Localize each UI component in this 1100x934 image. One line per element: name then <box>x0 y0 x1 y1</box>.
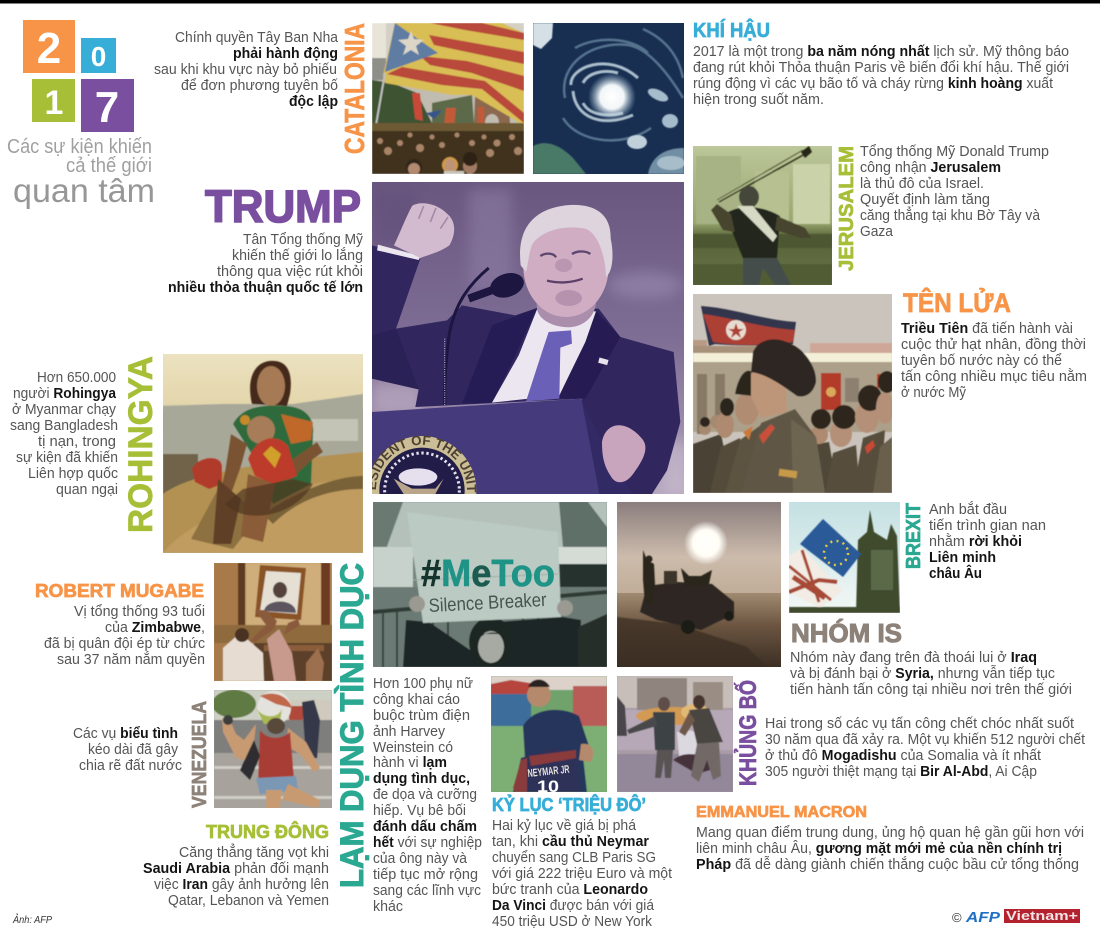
logo: AFP and Vietnam+: Vietnam+ <box>1006 908 1078 923</box>
text: Jerusalem: Tổng thống Mỹ Donald Trump <box>860 144 1049 160</box>
text: Brexit <box>929 501 1046 582</box>
text: Catalonia: để đơn phương tuyên bố <box>181 78 338 94</box>
panel: Emmanuel Macron <box>696 804 1084 873</box>
text: Rohingya: sang Bangladesh <box>10 418 118 434</box>
heading: Emmanuel Macron: EMMANUEL MACRON <box>696 804 867 821</box>
text: Robert Mugabe <box>44 604 205 668</box>
heading: Catalonia: CATALONIA <box>339 23 370 154</box>
text: Tên lửa: ở nước Mỹ <box>901 385 967 401</box>
heading: Nhóm IS: NHÓM IS <box>791 618 902 648</box>
text: Kỷ lục triệu đô: chuyển sang CLB Paris SG <box>492 850 656 866</box>
text: Lạm dụng tình dục: Hơn 100 phụ nữ <box>373 676 473 692</box>
soldier 3 <box>710 438 743 493</box>
heading: Khí hậu: KHÍ HẬU <box>693 18 770 42</box>
text: Lạm dụng tình dục <box>373 676 482 915</box>
square: digit 7 <box>81 79 134 132</box>
heading: Kỷ lục triệu đô: KỶ LỤC ‘TRIỆU ĐÔ’ <box>492 794 646 815</box>
photo: Mugabe portrait held up <box>214 563 332 681</box>
heading: Khủng bố: KHỦNG BỐ <box>733 680 762 786</box>
cuff <box>377 245 421 260</box>
text: Tên lửa <box>901 321 1087 401</box>
heading: Trump: TRUMP <box>205 181 361 232</box>
seal <box>368 436 476 545</box>
text: Kỷ lục triệu đô: Da Vinci được bán với giá <box>492 898 655 914</box>
subtitle <box>7 136 155 209</box>
text: Emmanuel Macron: Pháp đã dễ dàng giành chiến thắng cuộc bầu cử tổng thống <box>696 856 1079 873</box>
heading: Tên lửa: TÊN LỬA <box>903 286 1011 318</box>
panel: Venezuela <box>73 690 332 808</box>
shirt <box>492 309 596 403</box>
panel: Nhóm IS <box>617 502 1072 698</box>
text: Kỷ lục triệu đô: 450 triệu USD ở New York <box>492 914 653 930</box>
text: Trung Đông <box>143 843 329 909</box>
right group <box>811 442 838 493</box>
mic <box>445 268 489 405</box>
photo: #MeToo protest sign: Silence Breaker <box>428 590 548 617</box>
skirts <box>248 438 297 484</box>
text: Lạm dụng tình dục: của ông này và <box>373 851 468 867</box>
text: Khí hậu: đang rút khỏi Thỏa thuận Paris về biến đổi khí hậu. Thế giới <box>693 60 1069 76</box>
text: Tên lửa: tấn công nhiều mục tiêu nằm <box>901 368 1087 385</box>
text: Kỷ lục triệu đô: với giá 222 triệu Euro và một <box>492 866 672 882</box>
text: Rohingya: Liên hợp quốc <box>28 466 118 482</box>
text: Khủng bố: ở thủ đô Mogadishu của Somalia và ít nhất <box>765 748 1041 764</box>
text: Khí hậu: rúng động vì các vụ bão tố và cháy rừng kinh hoàng xuất <box>693 76 1053 92</box>
fist <box>394 203 454 258</box>
text: Nhóm IS: và bị đánh bại ở Syria, nhưng vẫn tiếp tục <box>790 665 1055 682</box>
main soldier <box>741 409 825 493</box>
text: Rohingya: ở Myanmar chạy <box>12 402 117 418</box>
text: Khủng bố <box>765 716 1085 780</box>
panel: Lạm dụng tình dục <box>334 502 607 915</box>
text: Nhóm IS <box>790 650 1072 698</box>
text: Kỷ lục triệu đô: tan, khi cầu thủ Neymar <box>492 834 649 850</box>
photo: #MeToo protest sign <box>373 502 607 667</box>
text: Lạm dụng tình dục: ảnh Harvey <box>373 724 446 740</box>
text: Lạm dụng tình dục: đe dọa và cưỡng <box>373 787 477 803</box>
legs <box>213 479 241 544</box>
text: Jerusalem: Quyết định làm tăng <box>860 192 990 208</box>
panel: Tên lửa <box>693 286 1087 493</box>
heading: Trung Đông: TRUNG ĐÔNG <box>206 821 329 842</box>
photo: aftermath of an attack <box>617 676 733 792</box>
text: Khí hậu: hiện trong suốt năm. <box>693 92 824 108</box>
text: Tên lửa: Triều Tiên đã tiến hành vài <box>901 321 1073 337</box>
pin <box>598 358 609 365</box>
tie <box>526 330 572 401</box>
text: Catalonia <box>154 30 339 110</box>
text: Jerusalem: công nhận Jerusalem <box>860 160 1001 176</box>
text: Robert Mugabe: Vị tổng thống 93 tuổi <box>74 604 205 620</box>
heading: Venezuela: VENEZUELA <box>189 701 211 808</box>
panel: Robert Mugabe <box>35 563 332 681</box>
neck and face <box>535 282 596 327</box>
text: Brexit: nhằm rời khỏi <box>929 533 1022 550</box>
heading: Jerusalem: JERUSALEM <box>836 146 858 271</box>
text: Rohingya: tị nạn, trong <box>38 434 116 450</box>
text: Lạm dụng tình dục: sang các lĩnh vực <box>373 883 481 899</box>
text: Jerusalem: Gaza <box>860 224 894 240</box>
square: digit 1 <box>32 79 75 122</box>
photo: Neymar with PSG shirt: 10 <box>537 777 559 796</box>
photo: stone slinger <box>693 146 832 285</box>
text: Trung Đông: Saudi Arabia phản đối mạnh <box>143 861 329 877</box>
text: Khí hậu <box>693 44 1069 108</box>
panel: Trump <box>168 181 684 494</box>
text: Lạm dụng tình dục: đánh dấu chấm <box>373 819 477 835</box>
text: Catalonia: sau khi khu vực này bỏ phiếu <box>154 62 337 78</box>
photo: Rohingya child <box>163 354 363 553</box>
photo: Neymar with PSG shirt <box>491 676 607 796</box>
text: Venezuela: Các vụ biểu tình <box>73 726 178 742</box>
text: Tên lửa: cuộc thử hạt nhân, đồng thời <box>901 337 1086 353</box>
text: Tên lửa: tuyên bố nước này có thể <box>901 353 1062 369</box>
text: Venezuela <box>73 726 182 774</box>
text: Trump <box>168 232 364 296</box>
photo: vehicle in desert at sunset <box>617 502 781 667</box>
text: Robert Mugabe: sau 37 năm nắm quyền <box>57 651 205 668</box>
photo: EU and UK flags at Westminster <box>789 502 900 613</box>
logo: AFP and Vietnam+: AFP <box>965 909 1001 926</box>
photo: hurricane from space <box>533 23 684 174</box>
photo: #MeToo protest sign: #MeToo <box>421 553 555 595</box>
text: Brexit: Liên minh <box>929 550 996 566</box>
photo: Trump at podium <box>372 182 684 494</box>
arms <box>221 434 247 494</box>
subtitle: quan tâm <box>13 172 155 209</box>
text: Emmanuel Macron: Mang quan điểm trung dung, ủng hộ quan hệ gần gũi hơn với <box>696 825 1084 841</box>
far left ranks <box>693 434 733 493</box>
text: Robert Mugabe: của Zimbabwe, <box>105 620 205 636</box>
text: Lạm dụng tình dục: Weinstein có <box>373 740 453 756</box>
panel: Catalonia <box>154 23 524 175</box>
panel: Khủng bố <box>617 676 1085 792</box>
square: digit 2 <box>23 20 75 73</box>
dress <box>233 406 313 504</box>
heading: Brexit: BREXIT <box>903 503 925 569</box>
text: Emmanuel Macron <box>696 825 1084 873</box>
text: Khủng bố: 305 người thiệt mạng tại Bir Al-Abd, Ai Cập <box>765 764 1037 780</box>
text: Catalonia: độc lập <box>289 94 338 110</box>
panel: Khí hậu <box>533 18 1069 174</box>
panel: Brexit <box>789 501 1046 613</box>
heading: Robert Mugabe: ROBERT MUGABE <box>35 581 204 601</box>
heading: Lạm dụng tình dục: LẠM DỤNG TÌNH DỤC <box>334 563 370 888</box>
text: Rohingya <box>10 370 118 498</box>
square: digit 0 <box>81 38 116 73</box>
text: Trump: nhiều thỏa thuận quốc tế lớn <box>168 280 363 296</box>
text: Trung Đông: Căng thẳng tăng vọt khi <box>179 843 329 861</box>
text: Brexit: châu Âu <box>929 564 982 582</box>
hand <box>602 425 645 482</box>
text: Rohingya: sự kiện đã khiến <box>16 450 118 466</box>
text: Nhóm IS: Nhóm này đang trên đà thoái lui ở Iraq <box>790 650 1037 666</box>
text: Venezuela: kéo dài đã gây <box>88 742 179 758</box>
text: Jerusalem: căng thẳng tại khu Bờ Tây và <box>860 206 1041 224</box>
text: Trump: Tân Tổng thống Mỹ <box>243 232 364 248</box>
text: Brexit: Anh bắt đầu <box>929 501 1007 518</box>
text: Robert Mugabe: đã bị quân đội ép từ chức <box>44 636 205 652</box>
heading: Rohingya: ROHINGYA <box>122 356 160 533</box>
text: Jerusalem: là thủ đô của Israel. <box>860 176 984 192</box>
text: Khủng bố: 30 năm qua đã xảy ra. Một vụ khiến 512 người chết <box>765 732 1085 748</box>
text: Kỷ lục triệu đô <box>492 818 672 930</box>
text: Brexit: tiến trình gian nan <box>929 518 1046 534</box>
suit <box>372 245 680 494</box>
baby <box>247 416 275 444</box>
panel: Kỷ lục triệu đô <box>491 676 672 930</box>
subtitle: cả thế giới <box>66 155 152 177</box>
podium <box>372 399 605 494</box>
logo: AFP and Vietnam+ <box>952 908 1080 926</box>
photo: Catalonia flag and crowd <box>372 23 524 174</box>
text: Trung Đông: Qatar, Lebanon và Yemen <box>168 893 329 909</box>
panel: Jerusalem <box>693 144 1049 285</box>
logo: AFP and Vietnam+: © <box>952 910 962 925</box>
hair <box>250 361 291 406</box>
subtitle: Các sự kiện khiến <box>7 136 152 158</box>
square: digit 7: 7 <box>95 83 119 132</box>
text: Trump: thông qua việc rút khỏi <box>217 264 363 280</box>
text: Lạm dụng tình dục: hiếp. Vụ bê bối <box>373 803 466 819</box>
text: Rohingya: quan ngại <box>56 482 118 498</box>
square: digit 0: 0 <box>91 41 106 72</box>
text: Trung Đông: việc Iran gây ảnh hưởng lên <box>154 877 329 893</box>
text: Catalonia: Chính quyền Tây Ban Nha <box>175 30 339 46</box>
text: Khủng bố: Hai trong số các vụ tấn công chết chóc nhất suốt <box>765 716 1074 732</box>
text: Nhóm IS: tiến hành tấn công tại nhiều nơi trên thế giới <box>790 682 1072 698</box>
photo: Venezuela protester <box>214 690 332 808</box>
photo: Neymar with PSG shirt: NEYMAR JR <box>527 764 570 780</box>
title block: 2017 <box>7 20 155 209</box>
text: Lạm dụng tình dục: tiếp tục mở rộng <box>373 867 478 883</box>
text: Trump: khiến thế giới lo lắng <box>232 247 363 264</box>
text: Jerusalem <box>860 144 1049 240</box>
photo credit: Ảnh: AFP <box>12 913 52 926</box>
photo: North Korean soldiers <box>693 294 892 493</box>
soldier 2 <box>725 422 773 493</box>
text: Lạm dụng tình dục: dụng tình dục, <box>373 771 470 787</box>
text: Rohingya: người Rohingya <box>13 386 117 402</box>
text: Khí hậu: 2017 là một trong ba năm nóng nhất lịch sử. Mỹ thông báo <box>693 44 1069 60</box>
text: Lạm dụng tình dục: công khai cáo <box>373 692 460 708</box>
text: Rohingya: Hơn 650.000 <box>37 370 116 386</box>
text: Lạm dụng tình dục: hành vi lạm <box>373 755 447 771</box>
text: Lạm dụng tình dục: khác <box>373 899 403 915</box>
text: Kỷ lục triệu đô: Hai kỷ lục về giá bị phá <box>492 818 637 834</box>
text: Emmanuel Macron: liên minh châu Âu, gương mặt mới mẻ của nền chính trị <box>696 840 1062 857</box>
square: digit 1: 1 <box>45 84 63 122</box>
photo: Trump at podium: ESIDENT OF THE UNITE <box>372 436 476 492</box>
square: digit 2: 2 <box>37 24 61 73</box>
top black bar <box>0 0 1100 4</box>
text: Venezuela: chia rẽ đất nước <box>79 758 182 774</box>
small flags <box>412 93 423 121</box>
text: Lạm dụng tình dục: buộc trùm điện <box>373 708 470 724</box>
text: Catalonia: phải hành động <box>233 46 338 62</box>
text: Kỷ lục triệu đô: bức tranh của Leonardo <box>492 882 648 898</box>
panel: Trung Đông <box>143 821 329 909</box>
text: Lạm dụng tình dục: hết với sự nghiệp <box>373 835 482 851</box>
panel: Rohingya <box>10 354 363 553</box>
